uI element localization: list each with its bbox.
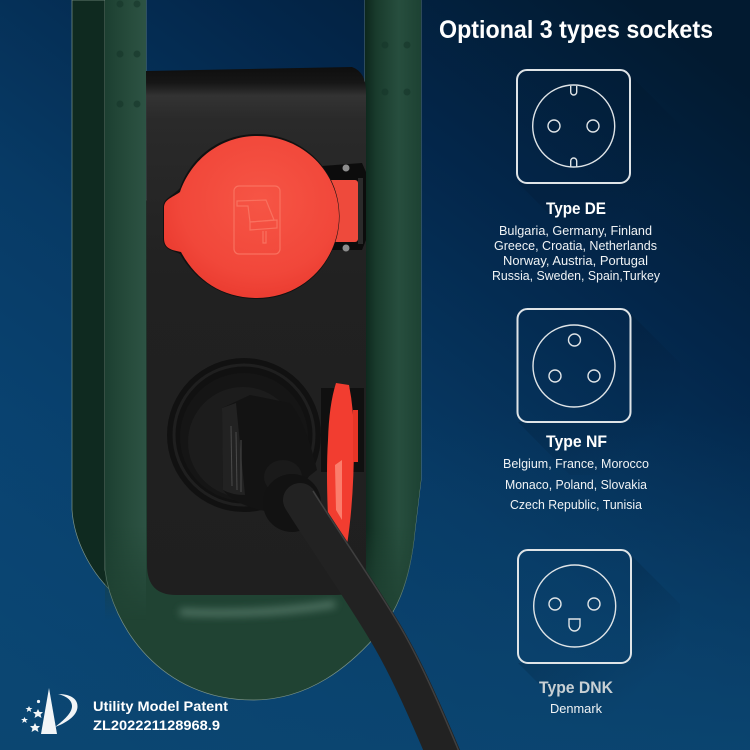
long shadow [518,75,680,235]
rear dark frame [72,0,130,590]
countries: Greece, Croatia, Netherlands [494,239,657,253]
icon on cover [234,186,280,254]
upper socket: red cover [163,134,340,299]
lip highlight below panel [180,604,335,613]
patent badge [21,688,228,734]
product: green power strip housing [72,0,421,700]
label: Type DNK [539,679,613,697]
countries: Bulgaria, Germany, Finland [499,224,652,238]
long shadow [518,314,680,475]
icon: patent logo [21,688,78,734]
front green frame [105,0,421,700]
plug body [222,395,317,511]
countries: Norway, Austria, Portugal [503,254,648,268]
strain relief [264,460,302,494]
heading: Optional 3 types sockets [439,16,713,44]
icon: DNK socket [518,550,631,663]
patent text: Utility Model Patent [93,698,228,714]
rail notches [116,0,410,108]
plug ribs [231,426,241,492]
panel: socket type DE [492,70,680,283]
power cord [300,491,463,750]
lower socket: plug and ring [167,358,321,532]
icon: DE socket [517,70,630,183]
label: Type DE [546,200,606,218]
black socket panel [146,67,366,595]
right rail [365,0,421,620]
countries: Russia, Sweden, Spain,Turkey [492,269,661,283]
long shadow [518,555,680,715]
countries: Monaco, Poland, Slovakia [505,478,647,492]
panel: socket type NF [503,309,680,512]
countries: Czech Republic, Tunisia [510,498,642,512]
countries [492,224,661,283]
countries: Denmark [550,702,603,716]
panel: socket type DNK [518,550,680,716]
patent badge: ZL202221128968.9 [93,717,220,733]
countries: Belgium, France, Morocco [503,457,649,471]
left rail [105,0,146,620]
icon: NF socket [518,309,630,422]
lower socket: opened red cover [327,383,358,545]
upper socket: hinge [322,163,366,252]
countries [503,457,649,512]
lower socket: side hinge [321,388,364,472]
label: Type NF [546,433,607,451]
